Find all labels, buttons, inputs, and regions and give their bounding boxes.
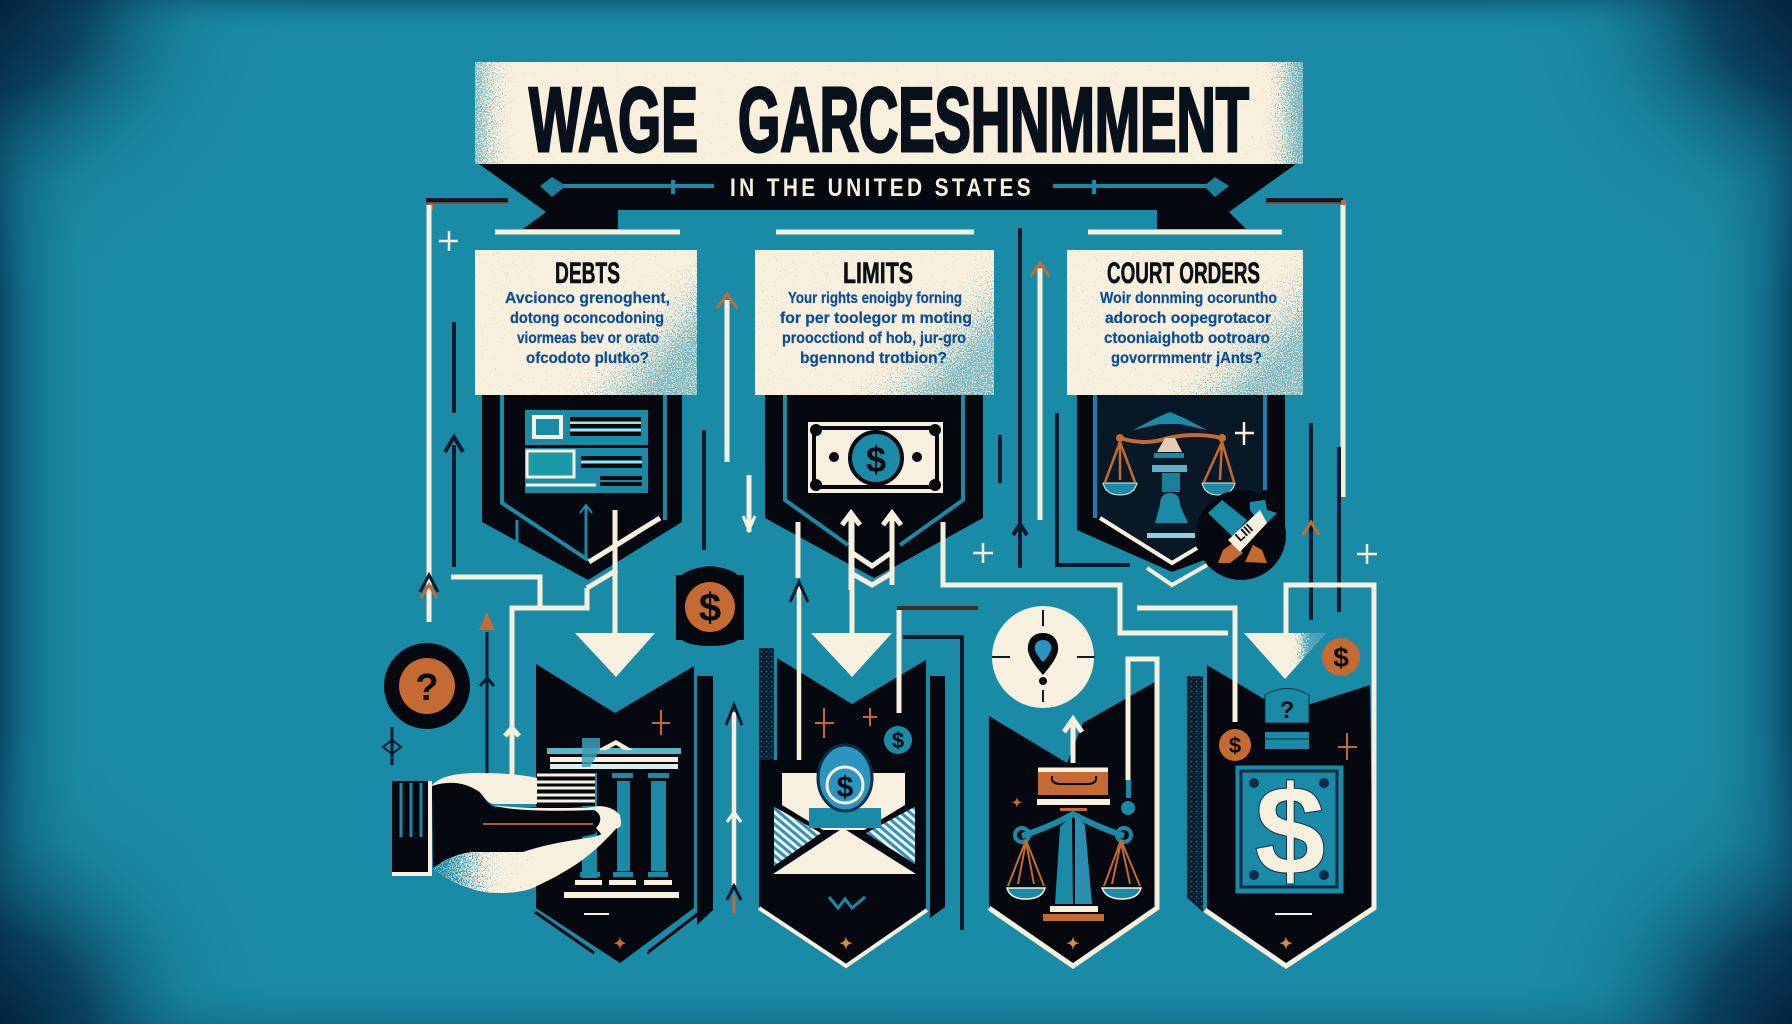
icon: dollar badge: $ — [699, 586, 721, 630]
icon: documents — [525, 410, 648, 493]
finger strip — [493, 805, 621, 835]
icon: lock with question: ? — [1280, 697, 1294, 724]
panel: envelope shield — [759, 648, 945, 968]
icon: small coin — [1121, 780, 1135, 815]
icon: lock with question — [1265, 688, 1309, 749]
title: WAGE — [529, 70, 698, 171]
icon: star: ✦ — [1279, 936, 1293, 953]
icon: plus — [652, 710, 670, 735]
icon: question badge — [384, 643, 470, 729]
icon: crossed gavels badge — [1196, 490, 1286, 580]
icon: orange coin left: $ — [1229, 733, 1241, 758]
text: debts body: dotong oconcodoning — [510, 310, 664, 327]
palm — [433, 824, 620, 893]
subtitle: IN THE UNITED STATES — [730, 174, 1034, 202]
icon: banknote: $ — [866, 439, 886, 480]
panel: debts shield — [482, 395, 682, 580]
text: debts body: viormeas bev or orato — [517, 330, 659, 347]
text: court orders body — [1100, 290, 1277, 367]
icon: small pin marker — [383, 727, 401, 765]
panel: debts card — [475, 250, 697, 395]
icon: bank building — [547, 738, 681, 915]
black ribbon — [479, 164, 1296, 229]
icon: dollar badge — [676, 566, 744, 646]
icon: plus marks — [815, 708, 877, 738]
coin stack — [537, 773, 595, 806]
icon: star: ✦ — [613, 936, 627, 953]
text: debts body: Avcionco grenoghent, — [505, 290, 670, 307]
panel: limits card — [755, 250, 994, 395]
icon: small teal dollar coin — [884, 726, 912, 754]
icon: down triangle one — [575, 633, 655, 677]
icon: plus — [1235, 422, 1254, 445]
icon: scales of justice — [1103, 412, 1235, 538]
text: limits body: for per toolegor m moting — [780, 310, 972, 327]
cuff — [392, 781, 430, 874]
hand shadow — [432, 783, 603, 868]
heading: debts: DEBTS — [555, 257, 620, 290]
text: court orders body: Woir donnming ocoruntho — [1100, 290, 1277, 307]
icon: orange coin left — [1219, 729, 1251, 761]
icon: plus — [1338, 733, 1357, 760]
icon: banknote — [810, 424, 941, 491]
ribbon ornament left — [540, 177, 714, 197]
ribbon ornament right — [1053, 177, 1229, 197]
title word two: GARCESHNMMENT — [738, 70, 1249, 171]
icon: gavel block — [1037, 767, 1110, 811]
title banner — [475, 62, 1303, 229]
text: court orders body: govorrmmentr jAnts? — [1111, 350, 1262, 367]
text: limits body: Your rights enoigby forning — [788, 290, 962, 307]
small plus signs — [439, 231, 1377, 564]
panel: dollar shield — [1187, 585, 1374, 968]
icon: hand holding coins — [392, 773, 621, 893]
icon: zigzag — [829, 897, 865, 908]
text: court orders body: adoroch oopegrotacor — [1105, 310, 1271, 327]
text: limits body: bgennond trotbion? — [800, 350, 947, 367]
panel: court orders shield — [1077, 395, 1286, 585]
icon: dollar plate: $ — [1255, 760, 1325, 901]
icon: scales — [1007, 814, 1141, 921]
icon: envelope — [773, 773, 916, 874]
text: debts body: ofcodoto plutko? — [526, 350, 649, 367]
icon: star: ✦ — [1012, 795, 1023, 810]
icon: star: ✦ — [839, 936, 853, 953]
text: debts body — [505, 290, 670, 367]
icon: crossed gavels badge: LIII — [1232, 521, 1256, 545]
text: court orders body: ctooniaighotb ootroaro — [1104, 330, 1270, 347]
icon: up arrow — [1064, 719, 1082, 763]
icon: small teal dollar coin: $ — [892, 728, 904, 753]
icon: down triangle three — [1244, 633, 1326, 679]
heading: court orders: COURT ORDERS — [1107, 257, 1260, 290]
heading: limits: LIMITS — [843, 257, 913, 290]
icon: dollar plate — [1237, 760, 1342, 901]
hand back — [432, 773, 537, 804]
icon: lock medallion: $ — [837, 771, 854, 804]
banner plate — [475, 62, 1303, 164]
panel: scales shield — [989, 659, 1159, 968]
icon: question badge: ? — [415, 667, 439, 709]
text: limits body: proocctiond of hob, jur-gro — [782, 330, 966, 347]
panel: limits shield — [765, 395, 983, 590]
icon: down triangle two — [811, 633, 892, 677]
icon: lock medallion — [818, 745, 872, 811]
icon: location compass — [992, 606, 1095, 708]
icon: orange coin right: $ — [1333, 642, 1349, 673]
connector lines and arrows in front of panels — [420, 510, 1235, 930]
text: limits body — [780, 290, 972, 367]
connector lines and arrows behind panels — [426, 200, 1346, 622]
panel: court orders card — [1067, 250, 1303, 395]
panel: bank shield — [535, 664, 713, 968]
icon: orange coin right — [1322, 638, 1360, 676]
icon: bottom star: ✦ — [1066, 936, 1080, 953]
